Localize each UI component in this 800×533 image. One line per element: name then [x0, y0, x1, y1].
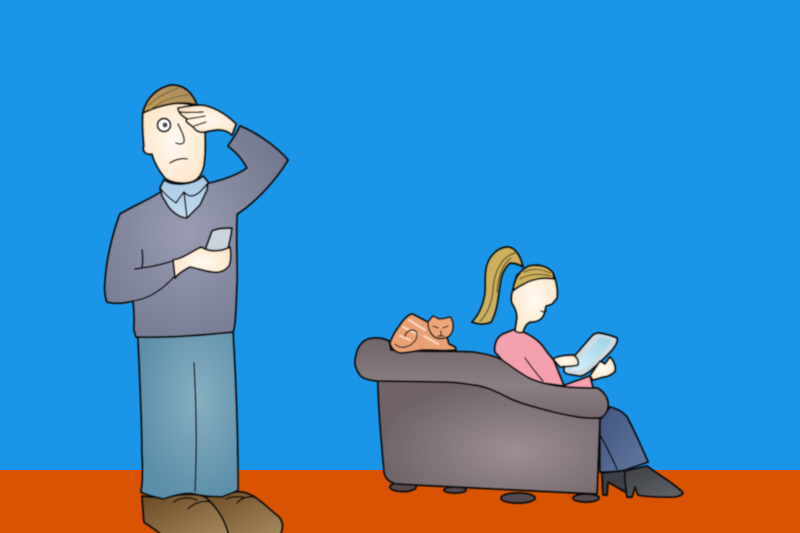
forearm lower edge: [133, 277, 174, 301]
shirt collar: [160, 176, 208, 218]
ponytail strands: [480, 253, 515, 321]
phone: [205, 228, 232, 253]
sleeve fold: [135, 250, 175, 269]
head: [143, 100, 205, 183]
cat: [390, 314, 456, 353]
far sleeve: [565, 376, 593, 388]
nose: [176, 124, 184, 144]
holding hand tablet: [590, 357, 615, 380]
head: [511, 265, 557, 333]
chair body: [378, 380, 600, 494]
torso: [495, 330, 564, 386]
armchair group: [355, 247, 683, 503]
near boot: [625, 466, 683, 497]
finger hand: [553, 355, 578, 367]
chair back and arm: [355, 338, 608, 418]
trousers: [138, 332, 238, 499]
hand on eye: [178, 105, 236, 135]
sleeve line: [525, 358, 543, 381]
chair feet: [390, 482, 599, 503]
fingers and covered eye: [180, 112, 206, 126]
holding hand: [173, 247, 231, 278]
shoes: [142, 492, 282, 533]
woman's hair: [513, 265, 554, 291]
woman's far boot: [602, 470, 632, 495]
mouth: [170, 159, 187, 163]
hair: [143, 85, 197, 113]
floor: [0, 470, 800, 533]
hair lines: [520, 269, 551, 279]
man: [105, 85, 288, 533]
jeans: [600, 407, 648, 472]
ponytail: [472, 247, 523, 324]
trouser crease: [194, 363, 196, 491]
sweater: [105, 126, 288, 337]
cat body: [390, 314, 456, 353]
smile: [541, 310, 546, 313]
leg line: [600, 435, 617, 469]
hair strands: [148, 88, 188, 110]
collar lines: [161, 184, 207, 218]
cat head: [428, 316, 453, 339]
cat stripes: [400, 320, 438, 344]
cat tail and features: [395, 326, 448, 347]
eye: [158, 118, 170, 132]
tablet: [564, 333, 617, 376]
